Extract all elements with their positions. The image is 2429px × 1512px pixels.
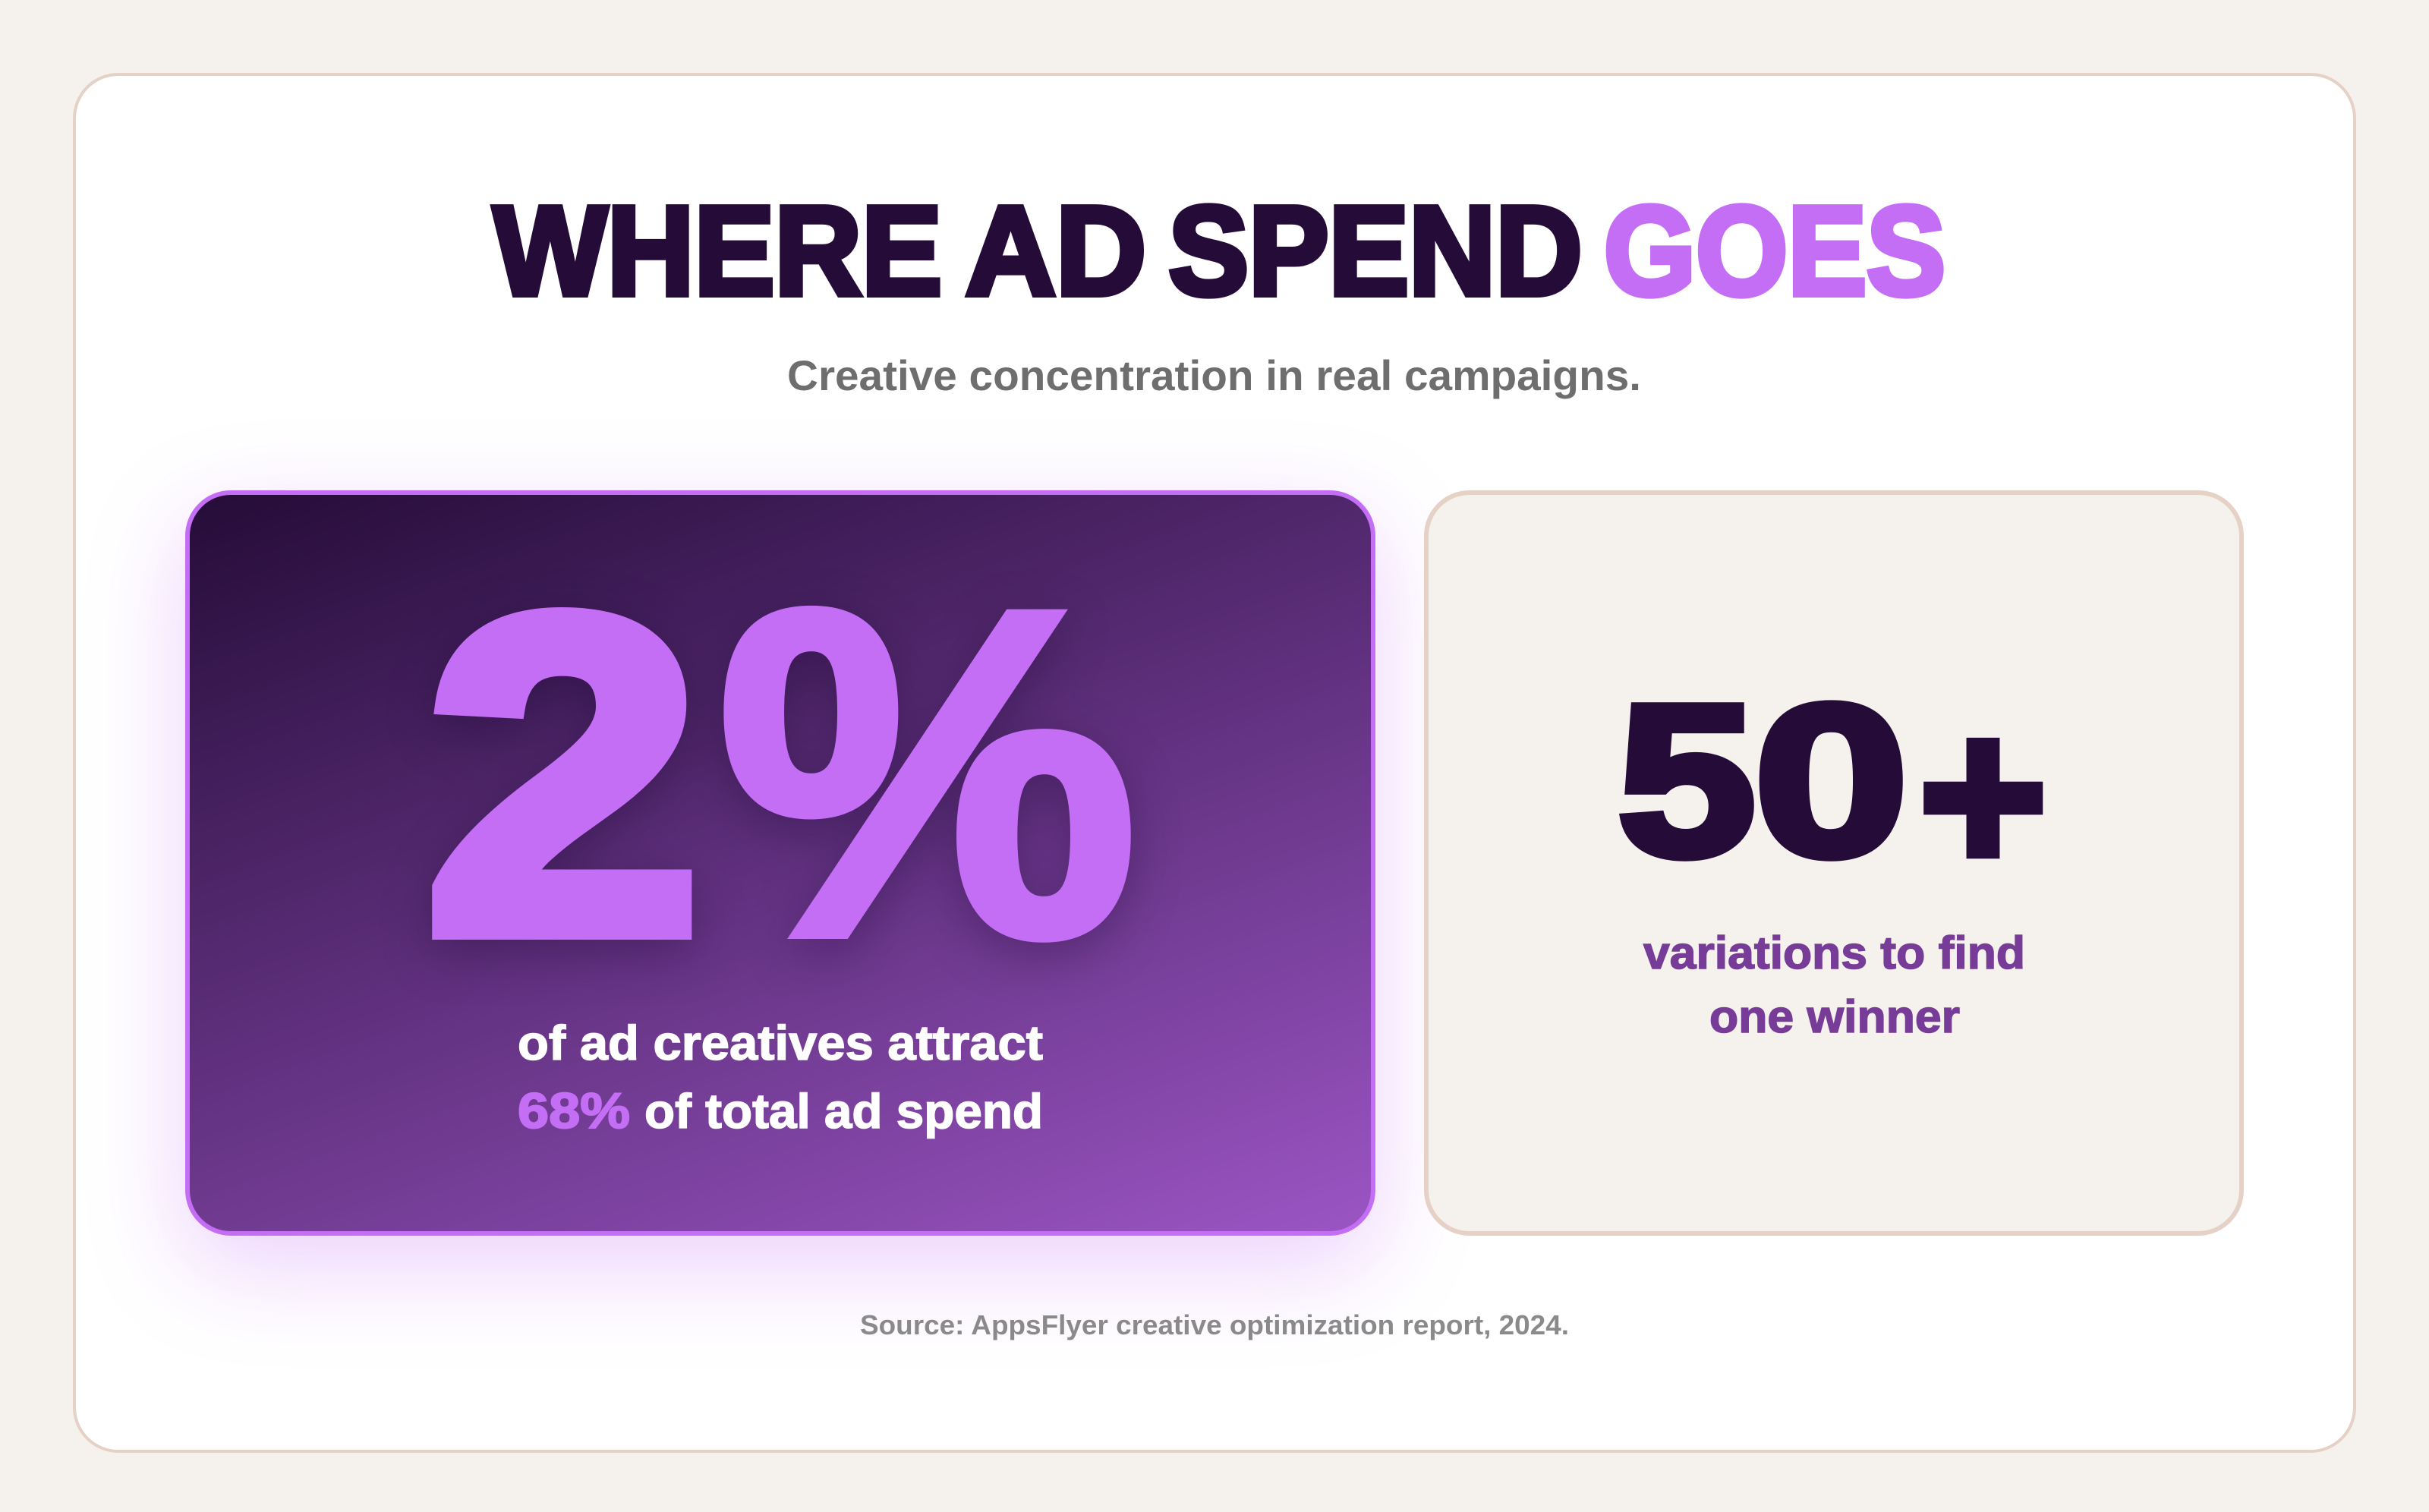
subtitle: Creative concentration in real campaigns. [787,351,1641,399]
big stat: 2%: % [717,515,1138,1032]
stat description: one winner [1709,991,1960,1042]
big stat: 2% [426,515,1138,1032]
stat description: variations to find [1643,928,2025,978]
source note: Source: AppsFlyer creative optimization report, 2024. [860,1309,1569,1340]
big stat: 50+: 0 [1754,660,1908,900]
stat description: of ad creatives attract [518,1016,1043,1070]
big stat: 2%: 2 [426,525,701,1025]
title: GOES [1604,181,1945,322]
title: AD [966,181,1146,322]
panel: 50+ stat card [1424,490,2244,1236]
big stat: 50+: + [1919,673,2047,918]
big stat: 50+ [1618,660,2047,918]
stat description: of total ad spend [644,1084,1043,1139]
stat description: 68% [518,1082,630,1139]
big stat: 50+: 5 [1618,660,1756,900]
stat description [518,1016,1043,1139]
panel: 2% highlighted stat card [185,490,1375,1236]
title: WHERE [493,181,942,322]
title [493,181,1945,322]
title: SPEND [1169,181,1582,322]
stat description [1643,928,2025,1042]
